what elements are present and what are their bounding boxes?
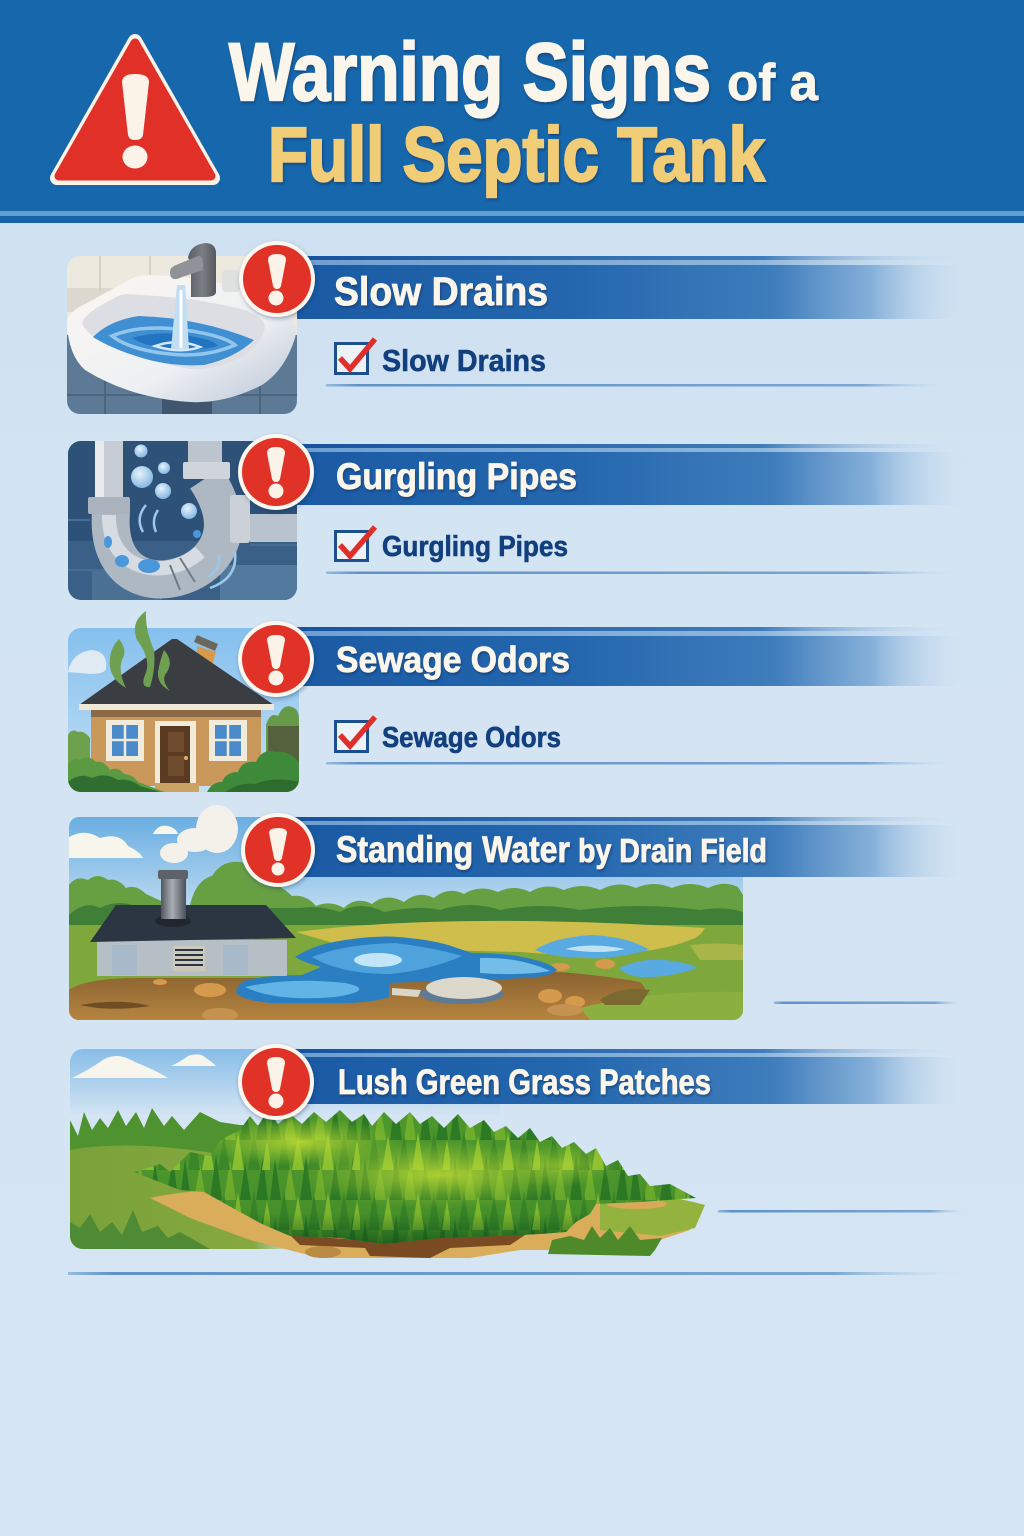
- badge: warning sewage odors: [238, 621, 314, 697]
- badge: warning lush grass: [238, 1044, 314, 1120]
- banner: slow drains: Slow Drains: [334, 270, 548, 314]
- divider: sewage odors: [326, 762, 960, 764]
- banner: lush green grass: Lush Green Grass Patches: [338, 1063, 711, 1102]
- checklist item: gurgling pipes: Gurgling Pipes: [382, 531, 568, 563]
- divider: grass upper: [718, 1210, 968, 1212]
- banner: standing water: [290, 817, 965, 877]
- header band: [0, 0, 1024, 223]
- panel: standing water by drain field: [69, 805, 965, 1022]
- banner: standing water: by Drain Field: [578, 832, 767, 869]
- checklist item: sewage odors: [336, 717, 561, 754]
- divider: grass lower: [68, 1272, 968, 1275]
- illustration: gurgling pipes with bubbles: [68, 441, 297, 600]
- panel: slow drains: [67, 241, 965, 414]
- checklist item: slow drains: [336, 339, 546, 378]
- divider: standing water: [774, 1002, 964, 1004]
- banner: slow drains: [290, 256, 965, 319]
- badge: warning slow drains: [239, 241, 315, 317]
- divider: gurgling pipes: [326, 572, 960, 574]
- badge: warning gurgling pipes: [238, 434, 314, 510]
- icon: smoke clouds: [160, 805, 238, 863]
- illustration: standing water by drain field: [69, 817, 743, 1022]
- title: [229, 27, 819, 198]
- banner: gurgling pipes: Gurgling Pipes: [336, 456, 577, 497]
- illustration: lush green grass: [70, 1049, 705, 1258]
- checklist item: gurgling pipes: [336, 527, 568, 563]
- illustration: house with odor: [68, 628, 299, 792]
- checklist item: sewage odors: Sewage Odors: [382, 722, 561, 754]
- panel: gurgling pipes: [68, 434, 965, 600]
- illustration: sink with slow draining water: [67, 256, 297, 414]
- panel: sewage odors: [68, 611, 965, 792]
- banner: sewage odors: [290, 627, 965, 686]
- title: Warning Signs: [229, 27, 711, 118]
- icon: warning triangle: [57, 41, 213, 178]
- panel: lush green grass patches: [68, 1044, 968, 1275]
- banner: lush green grass: [290, 1049, 965, 1104]
- icon: house and vent: [90, 870, 296, 976]
- checklist item: slow drains: Slow Drains: [382, 343, 546, 378]
- icon: odor wisps: [110, 611, 170, 691]
- title: Full Septic Tank: [268, 112, 765, 198]
- title: of a: [727, 54, 819, 112]
- banner: sewage odors: Sewage Odors: [336, 639, 570, 680]
- banner: standing water: Standing Water: [336, 829, 570, 870]
- badge: warning standing water: [241, 813, 315, 887]
- banner: gurgling pipes: [290, 444, 965, 505]
- divider: slow drains: [326, 384, 956, 386]
- icon: faucet: [170, 243, 216, 297]
